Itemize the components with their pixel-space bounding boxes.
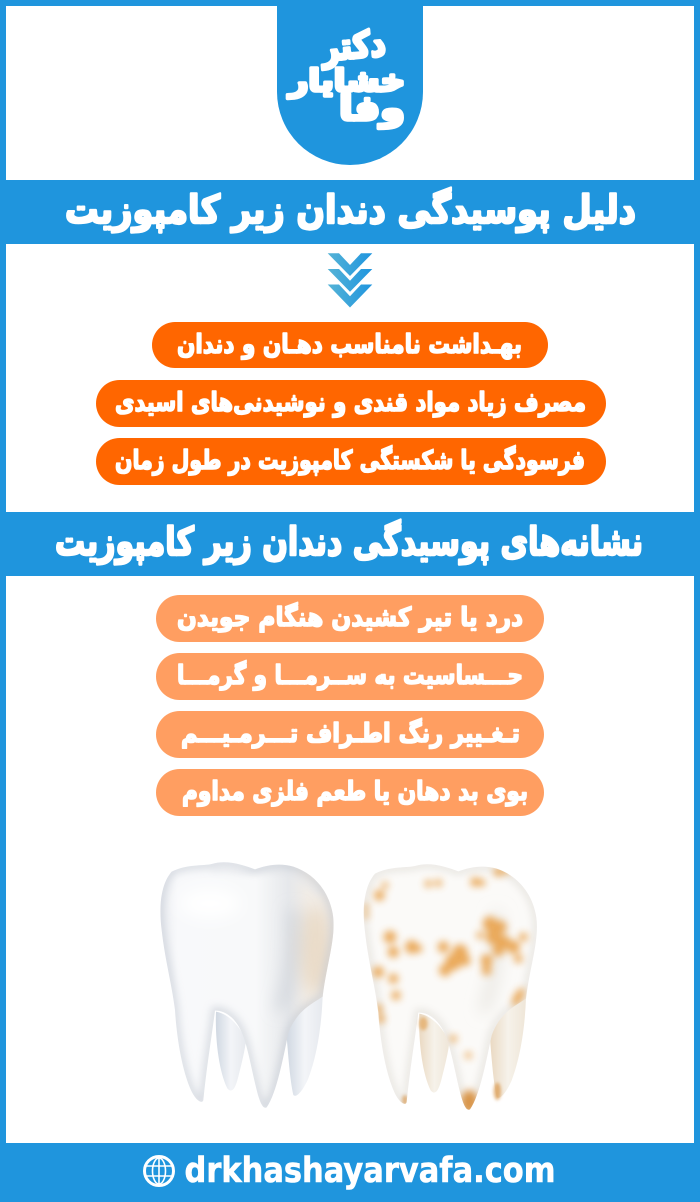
logo badge xyxy=(277,0,423,165)
pill: symptom 2: حـــساسیت به ســرمـــا و گرمـــا xyxy=(177,660,523,691)
pill: symptom 1: درد یا تیر کشیدن هنگام جویدن xyxy=(177,602,523,633)
heading bar: symptoms xyxy=(0,512,700,576)
pill: cause 1 xyxy=(152,322,548,368)
stained decayed tooth xyxy=(363,864,537,1114)
pill: cause 3: فرسودگی یا شکستگی کامپوزیت در طول زمان xyxy=(115,445,585,476)
pill: cause 1: بهـداشت نامناسب دهـان و دندان xyxy=(177,330,522,360)
logo text: doctor: دکتر xyxy=(318,23,387,70)
logo text: vafa: وفا xyxy=(339,89,405,129)
pill: symptom 4 xyxy=(156,769,544,816)
pill: symptom 4: بوی بد دهان یا طعم فلزی مداوم xyxy=(182,777,528,807)
stain patches xyxy=(363,867,528,1059)
website address: drkhashayarvafa.com xyxy=(184,1151,556,1191)
pill: symptom 3: تـغـییر رنگ اطـراف تـــرمـیـــم xyxy=(181,718,520,749)
heading bar: causes xyxy=(0,180,700,244)
logo text: khashayar: خشایار xyxy=(287,64,405,99)
pill: cause 2 xyxy=(96,380,606,427)
healthy white tooth xyxy=(160,862,334,1108)
pill: symptom 3 xyxy=(156,711,544,758)
pill: cause 3 xyxy=(96,438,606,485)
pill: cause 2: مصرف زیاد مواد قندی و نوشیدنی‌های اسیدی xyxy=(115,388,586,418)
icon: triple down chevrons xyxy=(328,253,372,308)
pill: symptom 2 xyxy=(156,653,544,700)
footer bar xyxy=(0,1143,700,1202)
pill: symptom 1 xyxy=(156,595,544,642)
icon: globe xyxy=(144,1156,174,1186)
